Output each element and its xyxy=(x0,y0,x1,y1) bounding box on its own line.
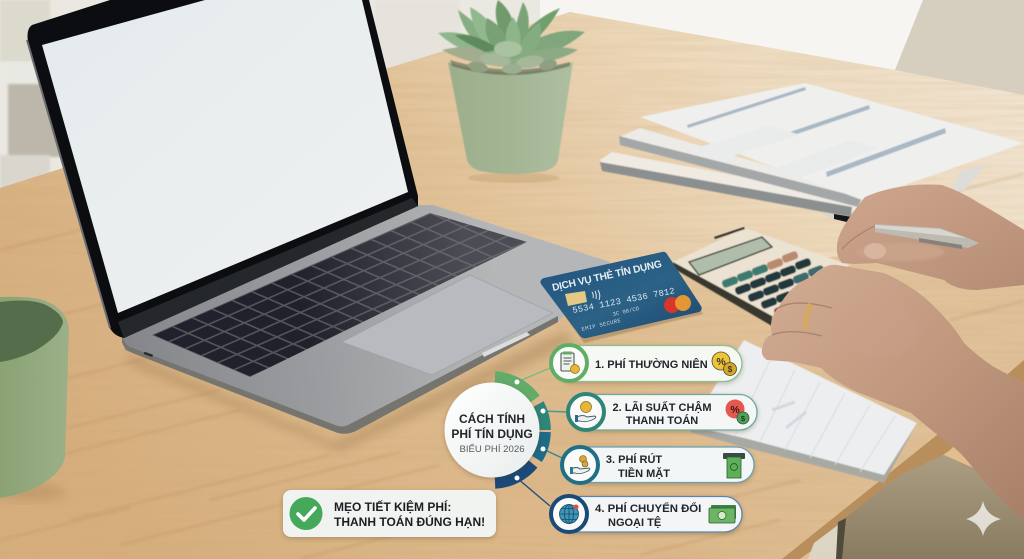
hub title: CÁCH TÍNH xyxy=(459,411,525,426)
laptop shadow xyxy=(125,330,575,452)
hub: progress ring xyxy=(495,377,545,483)
pen barrel xyxy=(875,224,979,249)
lower hand with ring xyxy=(762,265,1024,520)
icon: percent with coin xyxy=(726,400,749,424)
item 1: annual fee xyxy=(551,345,742,382)
pill xyxy=(555,496,742,532)
icon: cash from ATM slot xyxy=(723,453,745,478)
hub: title circle xyxy=(444,382,540,478)
card expiry: 3C 08/CO xyxy=(612,305,640,318)
laptop base xyxy=(122,205,610,432)
hub subtitle: BIỂU PHÍ 2026 xyxy=(459,443,525,455)
pill xyxy=(555,346,742,382)
label xyxy=(606,453,670,480)
tip text line 2: THANH TOÁN ĐÚNG HẠN! xyxy=(334,514,485,529)
icon: percent and dollar coins: % xyxy=(716,356,726,368)
item 3: cash withdrawal xyxy=(562,447,754,483)
infographic connectors xyxy=(517,368,567,506)
tip text xyxy=(334,499,485,529)
card chip xyxy=(565,291,587,306)
icon: percent and dollar coins xyxy=(712,352,736,376)
icon circle: globe xyxy=(551,496,587,532)
icon: percent and dollar coins: $ xyxy=(728,365,733,374)
pen tip xyxy=(819,212,852,223)
label: 2. LÃI SUẤT CHẬM xyxy=(612,401,712,414)
laptop xyxy=(27,0,610,452)
label xyxy=(595,502,701,529)
credit card xyxy=(540,252,703,343)
tip box xyxy=(283,490,496,537)
upper hand holding pen xyxy=(837,184,1024,290)
potted succulent xyxy=(438,0,585,183)
icon circle: document xyxy=(551,345,587,381)
tip text: MẸO TIẾT KIỆM PHÍ: xyxy=(334,499,451,514)
calculator keys xyxy=(721,251,825,316)
succulent leaves xyxy=(438,0,585,74)
card network logo xyxy=(664,295,691,313)
item 2: late interest xyxy=(568,394,757,430)
calculator display xyxy=(689,237,772,275)
label line 2: THANH TOÁN xyxy=(626,414,698,427)
card number: 5534 1123 4536 7812 xyxy=(572,286,676,316)
wedding ring xyxy=(806,304,811,330)
label: 4. PHÍ CHUYỂN ĐỔI xyxy=(595,502,701,515)
hub: ring dots xyxy=(514,380,546,480)
icon: percent with coin: % xyxy=(730,404,740,416)
icon circle: hand with coins xyxy=(562,447,598,483)
icon: percent with coin: $ xyxy=(741,414,746,423)
label: 3. PHÍ RÚT xyxy=(606,453,662,466)
green mug xyxy=(0,297,69,501)
icon circle: hand with coin xyxy=(568,394,604,430)
background: room wall base xyxy=(0,0,1024,210)
card secure label: EMIP SECURE xyxy=(581,317,622,333)
hub title line 2: PHÍ TÍN DỤNG xyxy=(451,426,533,441)
tip callout xyxy=(283,490,496,537)
pot xyxy=(448,62,573,174)
label line 2: TIỀN MẶT xyxy=(618,467,670,480)
laptop screen display xyxy=(42,0,408,313)
pill xyxy=(572,394,757,430)
background: room wall and curtain xyxy=(0,0,1024,190)
contactless mark xyxy=(592,290,600,300)
pill xyxy=(566,447,754,482)
label: 1. PHÍ THƯỜNG NIÊN xyxy=(595,358,708,371)
item 4: currency conversion xyxy=(551,496,742,532)
keyboard xyxy=(152,213,527,377)
stack of papers and folders xyxy=(600,83,1024,217)
person's legs under the desk xyxy=(808,455,1024,559)
watermark sparkle icon xyxy=(966,501,1001,536)
icon: green check xyxy=(290,497,322,530)
icon: banknotes xyxy=(709,505,736,523)
card title: DỊCH VỤ THẺ TÍN DỤNG xyxy=(551,257,663,294)
solar strip xyxy=(714,227,745,239)
hands xyxy=(762,184,1024,520)
label xyxy=(612,401,712,427)
label line 2: NGOẠI TỆ xyxy=(608,516,661,529)
usb port xyxy=(144,352,153,357)
laptop screen bezel xyxy=(28,0,418,338)
calculator xyxy=(673,227,850,326)
notepad xyxy=(690,340,917,483)
trackpad xyxy=(342,275,553,375)
